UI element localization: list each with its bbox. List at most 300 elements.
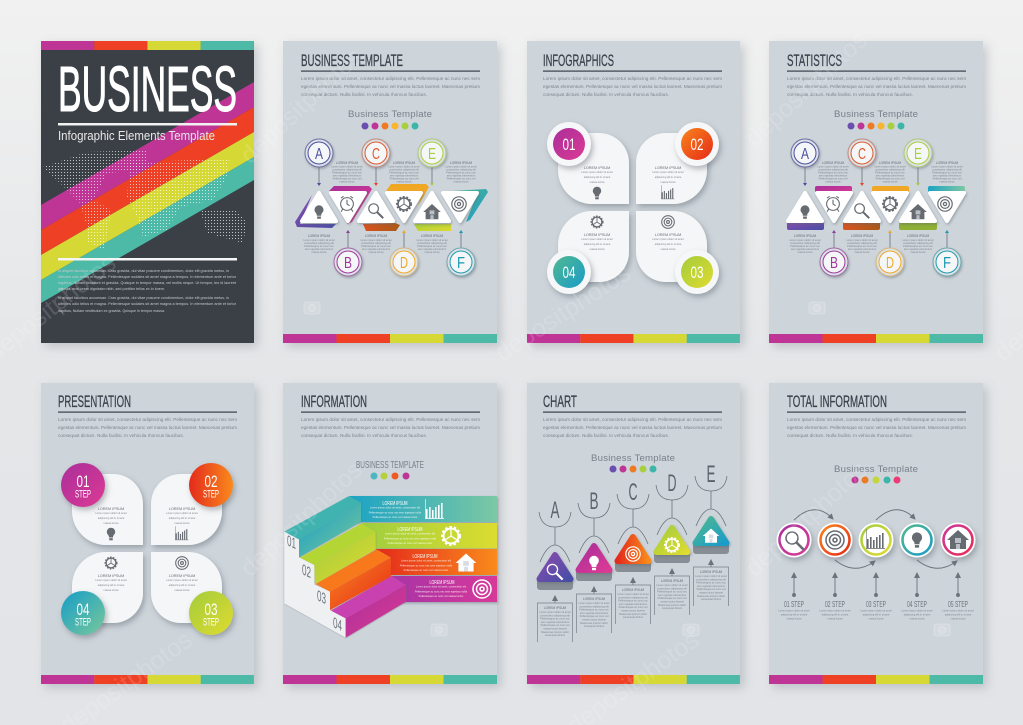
petal text and icons: LOREM IPSUM: [584, 233, 610, 237]
step B: B: [590, 488, 598, 515]
small text blocks: sem egestas elementum: [305, 247, 333, 251]
small text blocks: massa luctus: [825, 180, 841, 184]
step labels: Lorem ipsum dolor sit amet: [942, 610, 974, 612]
subheading: BUSINESS TEMPLATE: [356, 460, 424, 471]
stock photo watermarks: depositphotos: [235, 456, 368, 582]
step E: [693, 461, 729, 606]
small text blocks: massa luctus: [396, 180, 412, 184]
step D: Pellentesque ac nunc nec: [657, 590, 688, 594]
isometric staircase: [284, 496, 406, 638]
panel: statistics: [769, 41, 983, 343]
petal text and icons: LOREM IPSUM: [169, 507, 195, 511]
small text blocks: LOREM IPSUM: [879, 161, 901, 165]
small text blocks: sem egestas elementum: [362, 247, 390, 251]
colour bar: [41, 675, 254, 684]
small text blocks: Pellentesque ac nunc vel: [390, 176, 419, 180]
intro text: [543, 76, 722, 97]
small text blocks: sem egestas elementum: [933, 174, 961, 178]
heading rule: [301, 412, 480, 413]
small text blocks: [303, 161, 477, 254]
step C: massa luctus laoreet: [621, 608, 645, 612]
cover body text: dapibus, Nullam tincidunt et gravida. Quisque in tempor massa, vel mollis neque. Ut tempor, leo id laoreet: [58, 280, 237, 285]
intro text: Lorem ipsum dolor sit amet, consectetur adipiscing elit. Pellentesque ac nunc nec sem: [787, 76, 966, 81]
cover top colour bar: [41, 41, 254, 50]
intro text: Lorem ipsum dolor sit amet, consectetur adipiscing elit. Pellentesque ac nunc nec sem: [301, 417, 480, 422]
step labels: adipiscing elit in ornare: [781, 612, 808, 616]
stock photo watermarks: depositphotos: [235, 43, 368, 169]
step labels: Lorem ipsum dolor sit amet: [860, 610, 892, 612]
step C: [615, 479, 651, 624]
petal text and icons: massa luctus: [103, 521, 119, 525]
petal text and icons: Lorem ipsum dolor sit amet: [652, 238, 684, 241]
colour dots: [370, 472, 410, 480]
small text blocks: massa luctus: [453, 180, 469, 184]
small text blocks: LOREM IPSUM: [794, 234, 816, 238]
step E: Lorem ipsum dolor sit amet: [695, 575, 727, 578]
step circles: [776, 522, 976, 558]
petal text and icons: LOREM IPSUM: [169, 574, 195, 578]
petal text and icons: LOREM IPSUM: [98, 574, 124, 578]
petal text and icons: adipiscing elit in ornare: [655, 242, 682, 246]
lettered callouts with arrows: A: [315, 146, 323, 163]
lettered callouts with arrows: B: [344, 255, 352, 272]
camera watermark: [431, 624, 447, 636]
stair numbers: 01: [287, 533, 296, 553]
small text blocks: LOREM IPSUM: [393, 161, 415, 165]
small text blocks: massa luctus: [854, 250, 870, 254]
lettered callouts with arrows: E: [428, 146, 436, 163]
intro text: [58, 417, 237, 438]
step B: [576, 488, 612, 633]
numbered badges: 02: [690, 136, 704, 154]
subheading: Business Template: [834, 464, 918, 475]
intro text: [543, 417, 722, 438]
intro text: egestas elementum. Pellentesque ac nunc vel massa luctus laoreet. Maecenas pretium: [543, 425, 722, 430]
small text blocks: consectetur adipiscing elit: [847, 241, 877, 245]
small text blocks: Lorem ipsum dolor sit amet: [846, 239, 878, 242]
step E: Pellentesque ac nunc nec: [696, 581, 727, 585]
intro text: egestas elementum. Pellentesque ac nunc vel massa luctus laoreet. Maecenas pretium: [543, 84, 722, 89]
small text blocks: LOREM IPSUM: [822, 161, 844, 165]
small text blocks: massa luctus: [797, 250, 813, 254]
lettered callouts with arrows: [305, 139, 475, 276]
small text blocks: Lorem ipsum dolor sit amet: [388, 166, 420, 168]
heading: BUSINESS TEMPLATE: [301, 52, 403, 70]
numbered badges: 04: [562, 264, 576, 282]
lettered callouts with arrows: C: [372, 146, 380, 163]
heading: CHART: [543, 393, 577, 411]
petal text and icons: adipiscing elit in ornare: [584, 175, 611, 179]
step B: LOREM IPSUM: [583, 597, 605, 601]
lettered callouts with arrows: F: [943, 255, 951, 272]
small text blocks: Pellentesque ac nunc nec: [847, 244, 878, 248]
heading rule: [787, 70, 966, 72]
step B: Pellentesque ac nunc nec: [579, 608, 610, 612]
camera watermark: [934, 624, 950, 636]
ribbon texts: Pellentesque ac nunc nec sem egestas mollis: [415, 589, 468, 593]
step B: consectetur adipiscing elit: [579, 604, 609, 608]
colour dots: [362, 122, 418, 130]
step labels: massa luctus: [950, 616, 966, 620]
step E: massa luctus laoreet: [699, 590, 723, 594]
step badges: 02: [204, 472, 218, 491]
triangle row with icons: [302, 193, 477, 221]
petal text and icons: adipiscing elit in ornare: [98, 583, 125, 587]
ribbon texts: LOREM IPSUM: [382, 501, 408, 507]
stair numbers: 03: [317, 588, 326, 608]
heading: TOTAL INFORMATION: [787, 393, 887, 411]
colour bar: [527, 675, 740, 684]
ribbon texts: Pellentesque ac nunc vel massa luctus: [404, 568, 449, 572]
small text blocks: LOREM IPSUM: [421, 234, 443, 238]
ribbon texts: Pellentesque ac nunc vel massa luctus: [419, 594, 464, 598]
petal text and icons: LOREM IPSUM: [584, 166, 610, 170]
small text blocks: Pellentesque ac nunc nec: [417, 244, 448, 248]
step A: Maecenas pretium dolor: [541, 630, 569, 634]
petal text and icons: [581, 166, 684, 251]
small text blocks: sem egestas elementum: [791, 247, 819, 251]
small text blocks: massa luctus: [339, 180, 355, 184]
heading rule: [543, 412, 722, 413]
cover colour stripes: [41, 82, 254, 303]
petal text and icons: LOREM IPSUM: [655, 166, 681, 170]
small text blocks: LOREM IPSUM: [365, 234, 387, 238]
small text blocks: massa luctus: [939, 180, 955, 184]
ribbon texts: Lorem ipsum dolor sit amet, consectetur elit: [416, 586, 466, 588]
petal text and icons: massa luctus: [589, 180, 605, 184]
cover body text: ultricies odio tellus et magna. Pellentesque sodales sit amet magna a tempus. In elementum ante et tortor: [58, 274, 237, 279]
step labels: 01 STEP: [784, 599, 804, 609]
lettered callouts with arrows: E: [914, 146, 922, 163]
colour dots: [610, 466, 656, 472]
small text blocks: consectetur adipiscing elit: [446, 168, 476, 172]
step labels: 05 STEP: [948, 599, 968, 609]
subheading: Business Template: [348, 109, 432, 120]
step D: LOREM IPSUM: [661, 579, 683, 583]
small text blocks: consectetur adipiscing elit: [932, 168, 962, 172]
step D: Lorem ipsum dolor sit amet: [656, 584, 688, 587]
step badges: STEP: [75, 488, 91, 500]
colour bar: [769, 334, 983, 343]
ribbon texts: LOREM IPSUM: [412, 554, 438, 560]
step badges: 01: [76, 472, 90, 491]
small text blocks: sem egestas elementum: [333, 174, 361, 178]
small text blocks: sem egestas elementum: [418, 247, 446, 251]
ribbon texts: Lorem ipsum dolor sit amet, consectetur elit: [370, 506, 420, 510]
step C: Maecenas pretium dolor: [619, 612, 647, 616]
petal text and icons: Lorem ipsum dolor sit amet: [95, 579, 127, 582]
petal text and icons: Lorem ipsum dolor sit amet: [166, 579, 198, 582]
step labels: massa luctus: [868, 616, 884, 620]
petal text and icons: massa luctus: [660, 180, 676, 184]
small text blocks: Lorem ipsum dolor sit amet: [931, 166, 963, 168]
step C: C: [628, 479, 638, 506]
panel: presentation: [41, 383, 254, 684]
small text blocks: Lorem ipsum dolor sit amet: [902, 239, 934, 242]
subheading: Business Template: [591, 453, 675, 464]
heading: INFOGRAPHICS: [543, 52, 614, 70]
intro text: consequat dictum. Nulla facilisi. In vehicula rhoncus faucibus.: [543, 92, 669, 97]
small text blocks: Lorem ipsum dolor sit amet: [817, 166, 849, 168]
lettered callouts with arrows: F: [457, 255, 465, 272]
ribbon texts: [369, 501, 468, 598]
intro text: Lorem ipsum dolor sit amet, consectetur adipiscing elit. Pellentesque ac nunc nec sem: [58, 417, 237, 422]
intro text: [301, 417, 480, 438]
petal text and icons: adipiscing elit in ornare: [98, 516, 125, 520]
step labels: adipiscing elit in ornare: [904, 612, 931, 616]
small text blocks: Pellentesque ac nunc nec: [790, 244, 821, 248]
step labels: 04 STEP: [907, 599, 927, 609]
colour bar: [283, 334, 497, 343]
small text blocks: LOREM IPSUM: [336, 161, 358, 165]
heading rule: [301, 70, 480, 72]
small text blocks: massa luctus: [882, 180, 898, 184]
panel: information: [283, 383, 497, 684]
intro text: Lorem ipsum dolor sit amet, consectetur adipiscing elit. Pellentesque ac nunc nec sem: [301, 76, 480, 81]
small text blocks: massa luctus: [368, 250, 384, 254]
stair numbers: 04: [333, 615, 342, 635]
heading rule: [58, 412, 237, 413]
colour tabs: [787, 186, 965, 230]
step A: sem egestas elementum: [541, 620, 569, 624]
step B: massa luctus laoreet: [582, 618, 606, 622]
intro text: egestas elementum. Pellentesque ac nunc vel massa luctus laoreet. Maecenas pretium: [301, 84, 480, 89]
step labels: 02 STEP: [825, 599, 845, 609]
petal text and icons: massa luctus: [174, 588, 190, 592]
step A: Pellentesque ac nunc vel: [541, 623, 570, 627]
ribbon texts: Lorem ipsum dolor sit amet, consectetur elit: [385, 532, 435, 536]
ribbon texts: LOREM IPSUM: [430, 580, 455, 586]
small text blocks: Pellentesque ac nunc nec: [903, 244, 934, 248]
petal text and icons: adipiscing elit in ornare: [169, 583, 196, 587]
stock photo watermarks: depositphotos: [740, 456, 873, 582]
step D: Maecenas pretium dolor: [658, 603, 686, 607]
colour bar: [283, 675, 497, 684]
small text blocks: consectetur adipiscing elit: [389, 168, 419, 172]
dotted world map: [43, 150, 247, 250]
cover body text: In aliquet faucibus accumsan. Cras gravida, dui vitae posuere condimentum, dolor elit gravida metus, in: [58, 295, 229, 300]
intro text: consequat dictum. Nulla facilisi. In vehicula rhoncus faucibus.: [301, 92, 427, 97]
intro text: Lorem ipsum dolor sit amet, consectetur adipiscing elit. Pellentesque ac nunc nec sem: [543, 417, 722, 422]
intro text: consequat dictum. Nulla facilisi. In vehicula rhoncus faucibus.: [301, 433, 427, 438]
ribbon texts: Pellentesque ac nunc nec sem egestas mollis: [384, 536, 437, 540]
petal text and icons: Lorem ipsum dolor sit amet: [166, 512, 198, 515]
small text blocks: Pellentesque ac nunc vel: [819, 176, 848, 180]
step C: LOREM IPSUM: [622, 588, 644, 592]
step D: sem egestas elementum: [658, 593, 686, 597]
curved connector arrows: [794, 510, 957, 568]
panel: business template: [283, 41, 497, 343]
cover rule: [58, 123, 237, 126]
small text blocks: [789, 161, 963, 254]
small text blocks: sem egestas elementum: [819, 174, 847, 178]
ribbon texts: Pellentesque ac nunc vel massa luctus: [373, 515, 418, 519]
step labels: massa luctus: [786, 616, 802, 620]
small text blocks: sem egestas elementum: [876, 174, 904, 178]
step badges: 04: [76, 600, 90, 619]
step E: Maecenas pretium dolor: [697, 594, 725, 598]
lettered callouts with arrows: D: [886, 255, 894, 272]
small text blocks: Pellentesque ac nunc nec: [389, 170, 420, 174]
step A: Lorem ipsum dolor sit amet: [539, 611, 571, 614]
small text blocks: massa luctus: [424, 250, 440, 254]
stock photo watermarks: depositphotos: [490, 259, 636, 367]
small text blocks: consectetur adipiscing elit: [361, 241, 391, 245]
lettered callouts with arrows: A: [801, 146, 809, 163]
step E: Pellentesque ac nunc vel: [697, 587, 726, 591]
small text blocks: Lorem ipsum dolor sit amet: [360, 239, 392, 242]
cover title: BUSINESS: [58, 53, 237, 125]
lettered callouts with arrows: [791, 139, 961, 276]
small text blocks: consectetur adipiscing elit: [903, 241, 933, 245]
camera watermark: [809, 302, 825, 314]
small text blocks: consectetur adipiscing elit: [790, 241, 820, 245]
step C: consequat dictum: [623, 615, 643, 619]
small text blocks: LOREM IPSUM: [450, 161, 472, 165]
small text blocks: consectetur adipiscing elit: [818, 168, 848, 172]
step labels: Lorem ipsum dolor sit amet: [778, 610, 810, 612]
petal text and icons: massa luctus: [589, 247, 605, 251]
numbered badges: [547, 122, 719, 294]
lettered callouts with arrows: D: [400, 255, 408, 272]
intro text: consequat dictum. Nulla facilisi. In vehicula rhoncus faucibus.: [787, 92, 913, 97]
small text blocks: Lorem ipsum dolor sit amet: [445, 166, 477, 168]
cover body text: ultricies odio tellus et magna. Pellentesque sodales sit amet magna a tempus. In elementum ante et tortor: [58, 301, 237, 306]
step labels: Lorem ipsum dolor sit amet: [901, 610, 933, 612]
ribbon icons: [425, 499, 491, 598]
step badges: [61, 463, 233, 635]
small text blocks: sem egestas elementum: [904, 247, 932, 251]
colour ribbons: [350, 496, 497, 602]
triangle row with icons: [788, 193, 964, 221]
small text blocks: LOREM IPSUM: [936, 161, 958, 165]
petal text and icons: adipiscing elit in ornare: [169, 516, 196, 520]
stock photo watermarks: depositphotos: [740, 26, 873, 152]
petal text and icons: massa luctus: [103, 588, 119, 592]
step C: consectetur adipiscing elit: [618, 595, 648, 599]
subheading: Business Template: [834, 109, 918, 120]
step B: Maecenas pretium dolor: [580, 621, 608, 625]
colour ribbons: [295, 184, 488, 231]
small text blocks: LOREM IPSUM: [308, 234, 330, 238]
step D: consequat dictum: [662, 606, 682, 610]
step A: A: [550, 497, 560, 524]
step labels: massa luctus: [827, 616, 843, 620]
cover lower rule: [58, 258, 237, 260]
petal text and icons: adipiscing elit in ornare: [655, 175, 682, 179]
petal text and icons: Lorem ipsum dolor sit amet: [652, 171, 684, 174]
step D: consectetur adipiscing elit: [657, 586, 687, 590]
small text blocks: consectetur adipiscing elit: [875, 168, 905, 172]
step B: Lorem ipsum dolor sit amet: [578, 602, 610, 605]
petal text and icons: LOREM IPSUM: [655, 233, 681, 237]
cover body text: dapibus, Nullam vestibulum ex gravida. Quisque in tempor massa.: [58, 308, 165, 313]
step badges: STEP: [203, 488, 219, 500]
step badges: STEP: [75, 616, 91, 628]
small text blocks: Pellentesque ac nunc nec: [332, 170, 363, 174]
step D: massa luctus laoreet: [660, 600, 684, 604]
petal text and icons: massa luctus: [660, 247, 676, 251]
intro text: egestas elementum. Pellentesque ac nunc vel massa luctus laoreet. Maecenas pretium: [301, 425, 480, 430]
step A: [537, 497, 573, 642]
step E: E: [706, 461, 716, 488]
step labels: Lorem ipsum dolor sit amet: [819, 610, 851, 612]
panel: total information: [769, 383, 983, 684]
step labels: adipiscing elit in ornare: [863, 612, 890, 616]
intro text: consequat dictum. Nulla facilisi. In vehicula rhoncus faucibus.: [787, 433, 913, 438]
four petals: [72, 474, 222, 623]
small text blocks: Pellentesque ac nunc vel: [876, 176, 905, 180]
small text blocks: Pellentesque ac nunc vel: [333, 176, 362, 180]
petal text and icons: LOREM IPSUM: [98, 507, 124, 511]
step labels: [778, 599, 974, 620]
small text blocks: Pellentesque ac nunc nec: [818, 170, 849, 174]
step D: D: [668, 470, 676, 497]
step labels: massa luctus: [909, 616, 925, 620]
heading rule: [543, 70, 722, 72]
petal text and icons: Lorem ipsum dolor sit amet: [95, 512, 127, 515]
step D: [654, 470, 690, 615]
ribbon texts: Pellentesque ac nunc vel massa luctus: [388, 541, 433, 545]
intro text: Lorem ipsum dolor sit amet, consectetur adipiscing elit. Pellentesque ac nunc nec sem: [543, 76, 722, 81]
ribbon texts: Pellentesque ac nunc nec sem egestas mollis: [400, 563, 453, 567]
small text blocks: Pellentesque ac nunc nec: [875, 170, 906, 174]
numbered badges: 03: [690, 264, 704, 282]
heading: PRESENTATION: [58, 393, 131, 411]
colour dots: [852, 476, 900, 484]
small text blocks: LOREM IPSUM: [907, 234, 929, 238]
step C: sem egestas elementum: [619, 602, 647, 606]
small text blocks: massa luctus: [311, 250, 327, 254]
petal text and icons: Lorem ipsum dolor sit amet: [581, 171, 613, 174]
step A: consequat dictum: [545, 633, 565, 637]
small text blocks: Lorem ipsum dolor sit amet: [874, 166, 906, 168]
intro text: [787, 417, 966, 438]
small text blocks: Lorem ipsum dolor sit amet: [303, 239, 335, 242]
four petals: [558, 133, 707, 282]
panel: cover: [41, 41, 254, 343]
upward arrows: [792, 573, 960, 596]
small text blocks: Pellentesque ac nunc vel: [933, 176, 962, 180]
intro text: [301, 76, 480, 97]
step A: massa luctus laoreet: [543, 626, 567, 630]
colour bar: [769, 675, 983, 684]
step C: Pellentesque ac nunc vel: [619, 605, 648, 609]
colour bar: [527, 334, 740, 343]
intro text: egestas elementum. Pellentesque ac nunc vel massa luctus laoreet. Maecenas pretium: [787, 84, 966, 89]
cover body text: gravida, erat lorem dignissim nibh, sed porttitor tellus ex in lorem.: [58, 286, 165, 291]
small text blocks: Pellentesque ac nunc nec: [361, 244, 392, 248]
small text blocks: sem egestas elementum: [447, 174, 475, 178]
ribbon texts: Pellentesque ac nunc nec sem egestas mollis: [369, 510, 422, 514]
intro text: Lorem ipsum dolor sit amet, consectetur adipiscing elit. Pellentesque ac nunc nec sem: [787, 417, 966, 422]
step E: consequat dictum: [701, 597, 721, 601]
step B: sem egestas elementum: [580, 611, 608, 615]
panel: chart: [527, 383, 740, 684]
small text blocks: Pellentesque ac nunc nec: [446, 170, 477, 174]
step C: Pellentesque ac nunc nec: [618, 599, 649, 603]
cover body text: [58, 268, 237, 313]
stair numbers: [287, 533, 342, 635]
step D: Pellentesque ac nunc vel: [658, 596, 687, 600]
intro text: egestas elementum. Pellentesque ac nunc vel massa luctus laoreet. Maecenas pretium: [787, 425, 966, 430]
small text blocks: Lorem ipsum dolor sit amet: [416, 239, 448, 242]
small text blocks: Lorem ipsum dolor sit amet: [789, 239, 821, 242]
petal text and icons: adipiscing elit in ornare: [584, 242, 611, 246]
small text blocks: Pellentesque ac nunc vel: [447, 176, 476, 180]
step B: consequat dictum: [584, 624, 604, 628]
heading: STATISTICS: [787, 52, 842, 70]
